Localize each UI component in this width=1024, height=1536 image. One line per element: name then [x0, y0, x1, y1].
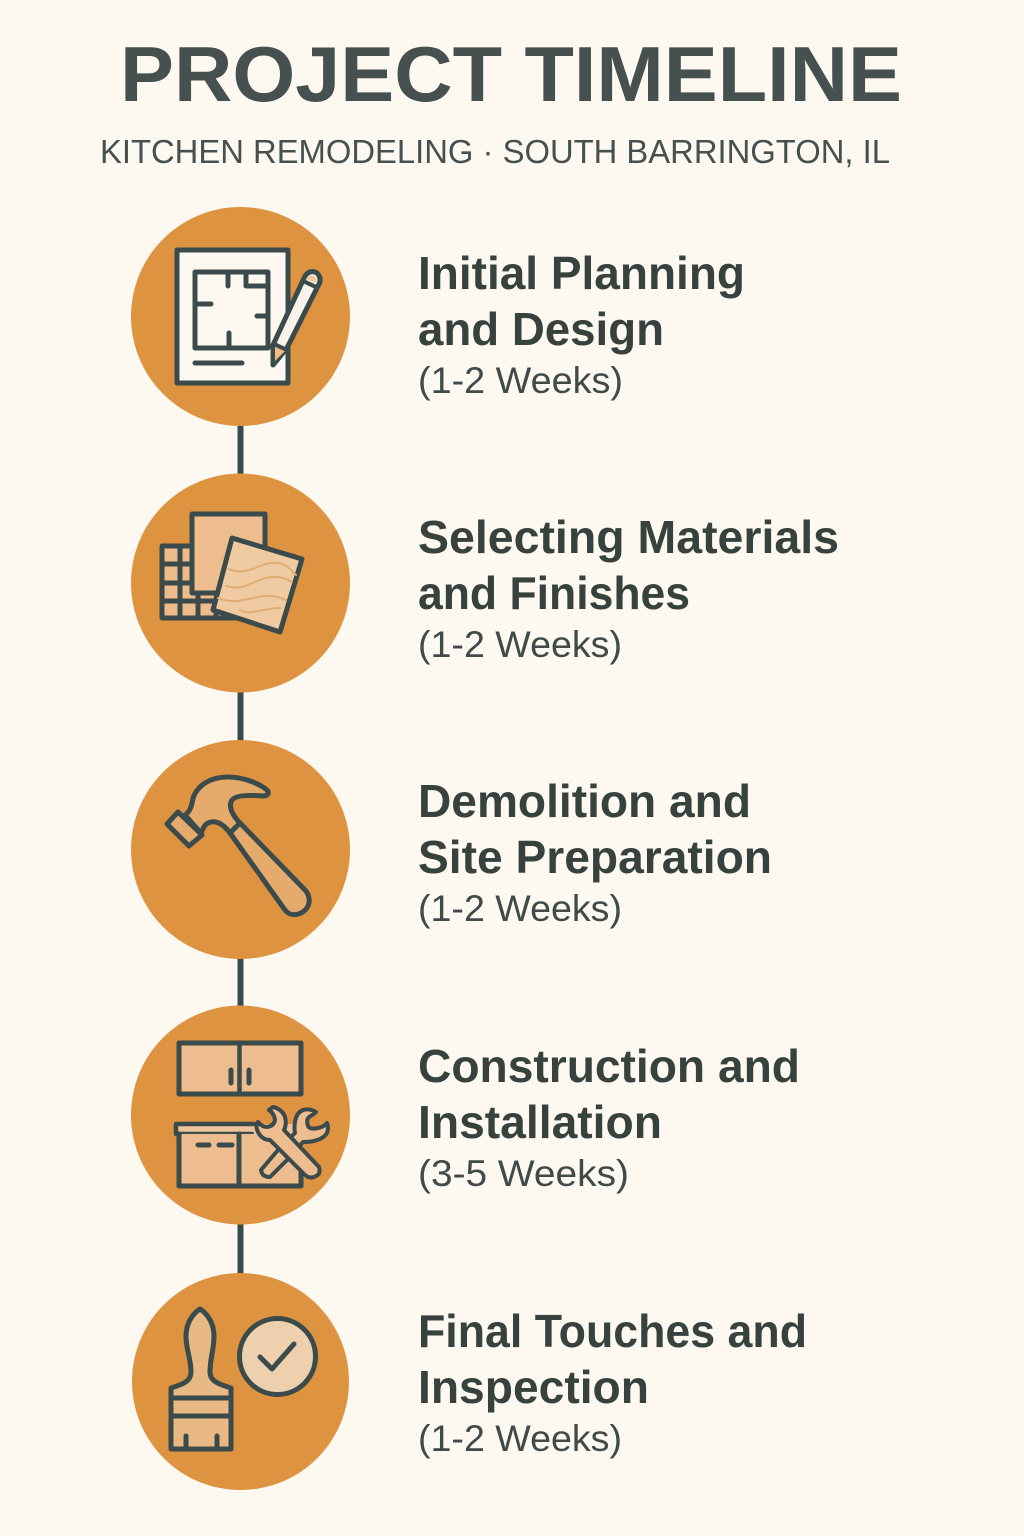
step 3: demolition: [131, 740, 772, 959]
step 2: selecting materials: [131, 474, 839, 692]
step 2 duration: (1-2 Weeks): [418, 624, 622, 665]
step 1 heading: Initial Planning: [418, 247, 745, 299]
step 3 heading: Demolition and: [418, 775, 751, 827]
step 5 heading: Final Touches and: [418, 1305, 807, 1357]
step 5 duration: (1-2 Weeks): [418, 1418, 622, 1459]
icon: cabinets and tools: [176, 1043, 328, 1186]
icon: material samples: [162, 514, 302, 632]
step 4 duration: (3-5 Weeks): [418, 1153, 629, 1194]
icon: floor plan and pencil: [177, 250, 320, 383]
step 3: demolition: Site Preparation: [418, 831, 772, 883]
step 2 heading: Selecting Materials: [418, 511, 839, 563]
step 4: construction: [131, 1006, 800, 1224]
icon: hammer: [167, 777, 309, 915]
step 1 circle: [131, 207, 350, 426]
step 1: initial planning: [131, 207, 745, 426]
step 1 duration: (1-2 Weeks): [418, 360, 623, 401]
step 4 heading: Construction and: [418, 1040, 800, 1092]
step 5: final touches: Inspection: [418, 1361, 649, 1413]
step 5 circle: [132, 1273, 349, 1490]
step 5: final touches: [132, 1273, 807, 1490]
subtitle: KITCHEN REMODELING · SOUTH BARRINGTON, IL: [100, 133, 890, 170]
icon: crossed wrenches: [256, 1107, 328, 1178]
timeline connector: [238, 420, 244, 1278]
step 1: initial planning: and Design: [418, 303, 664, 355]
title: PROJECT TIMELINE: [120, 30, 902, 118]
step 2: selecting materials: and Finishes: [418, 567, 690, 619]
icon: paint brush and check: [171, 1309, 316, 1449]
step 3 circle: [131, 740, 350, 959]
step 3 duration: (1-2 Weeks): [418, 888, 622, 929]
step 4: construction: Installation: [418, 1096, 662, 1148]
step 4 circle: [131, 1006, 350, 1224]
step 2 circle: [131, 474, 350, 692]
